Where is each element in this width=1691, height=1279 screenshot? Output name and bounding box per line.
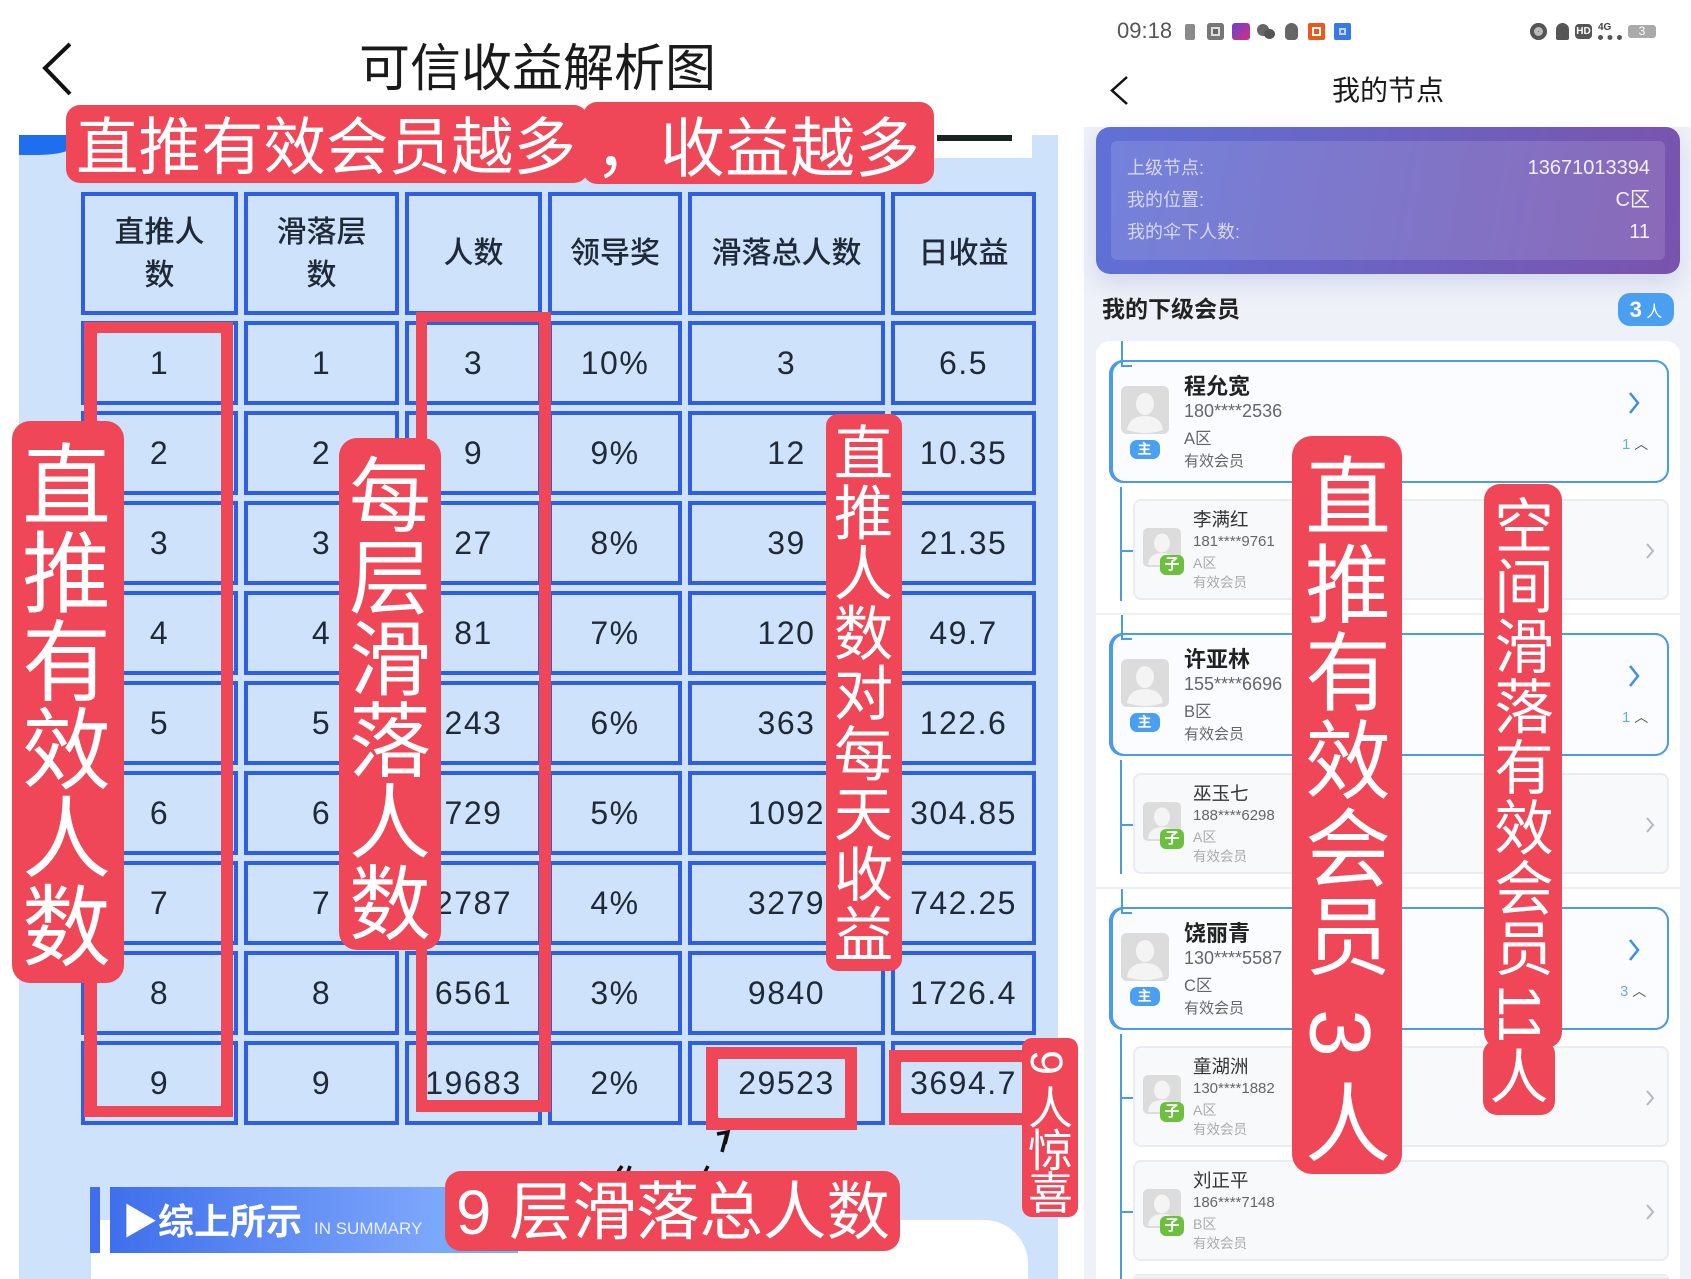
table row 2: 10.35 bbox=[920, 435, 1007, 471]
table row 6: 6 bbox=[312, 795, 331, 831]
table row 4 bbox=[124, 591, 1036, 675]
black stroke top right bbox=[937, 135, 1012, 141]
connector top 2 bbox=[1121, 615, 1132, 640]
member card: 许亚林 bbox=[1109, 633, 1669, 756]
arrow bbox=[1646, 1090, 1654, 1106]
phone: 188****6298 bbox=[1193, 807, 1275, 824]
badge: 子 bbox=[1164, 1217, 1180, 1234]
member card: 巫玉七 bbox=[1133, 773, 1669, 874]
area: B区 bbox=[1193, 1216, 1216, 1232]
red outline: 3694.7 cell bbox=[889, 1050, 1034, 1125]
table row 5: 6% bbox=[590, 705, 640, 741]
callout: top headline part 2: ，收益越多 bbox=[595, 112, 920, 184]
phone: 186****7148 bbox=[1193, 1194, 1275, 1211]
name: 巫玉七 bbox=[1193, 783, 1249, 804]
table row 9: 29523 bbox=[738, 1065, 835, 1101]
badge bbox=[1160, 555, 1184, 575]
table row 4: 120 bbox=[758, 615, 815, 651]
table header row: 日收益 bbox=[918, 237, 1008, 270]
phone: 130****5587 bbox=[1184, 948, 1282, 968]
table row 8: 6561 bbox=[435, 975, 512, 1011]
table row 9: 3694.7 bbox=[910, 1065, 1017, 1101]
name: 程允宽 bbox=[1184, 374, 1250, 399]
table row 1: 3 bbox=[777, 345, 796, 381]
red outline: people count column bbox=[416, 312, 551, 1112]
count badge bbox=[1618, 293, 1674, 326]
status bar left icons bbox=[1185, 23, 1351, 40]
summary heading text: ▶综上所示 bbox=[122, 1201, 302, 1242]
member card: 程允宽 bbox=[1109, 360, 1669, 483]
status bar right icons: HD bbox=[1576, 26, 1591, 37]
table row 3: 21.35 bbox=[920, 525, 1007, 561]
group divider 2 bbox=[1096, 887, 1680, 889]
status bar time: 09:18 bbox=[1117, 18, 1172, 43]
connector top 1 bbox=[1121, 341, 1132, 367]
arrow bbox=[1646, 818, 1654, 832]
table header row: 数 bbox=[306, 258, 336, 292]
table row 3: 39 bbox=[767, 525, 806, 561]
data table bbox=[81, 192, 1036, 1125]
table row 7: 4% bbox=[590, 885, 640, 921]
table header row: 滑落层 bbox=[276, 216, 366, 248]
name: 饶丽青 bbox=[1184, 921, 1250, 946]
phone: 180****2536 bbox=[1184, 401, 1282, 421]
name: 许亚林 bbox=[1184, 647, 1250, 672]
table row 2: 9 bbox=[464, 435, 483, 471]
status: 有效会员 bbox=[1193, 1122, 1247, 1137]
table row 9: 2% bbox=[590, 1065, 640, 1101]
label: my position: 我的位置: bbox=[1127, 190, 1204, 210]
name: 李满红 bbox=[1193, 509, 1249, 530]
hand-drawn arrow marks bbox=[616, 1130, 730, 1171]
value: my umbrella count: 11 bbox=[1629, 221, 1650, 243]
summary section white panel bbox=[91, 1220, 1028, 1279]
callout: vertical per-layer spillover: 每层滑落人数 bbox=[336, 453, 428, 943]
table header row: 人数 bbox=[444, 237, 504, 270]
table row 5: 243 bbox=[445, 705, 502, 741]
table row 9: 9 bbox=[150, 1065, 169, 1101]
table row 7: 742.25 bbox=[910, 885, 1017, 921]
table header row: 直推人 bbox=[114, 216, 204, 248]
avatar bbox=[1143, 1075, 1181, 1114]
table row 8: 9840 bbox=[748, 975, 825, 1011]
table row 1: 10% bbox=[581, 345, 649, 381]
table row 5: 363 bbox=[758, 705, 815, 741]
table header row: 领导奖 bbox=[570, 237, 660, 270]
right title: 我的节点 bbox=[1332, 75, 1444, 106]
table row 6: 1092 bbox=[748, 795, 825, 831]
table row 1: 1 bbox=[312, 345, 331, 381]
table row 4: 49.7 bbox=[929, 615, 998, 651]
connector branch 4 bbox=[1122, 1211, 1133, 1213]
avatar bbox=[1121, 386, 1169, 434]
badge: 主 bbox=[1138, 714, 1152, 730]
status bar right icons: 3 bbox=[1639, 24, 1645, 38]
callout: nine layer spillover total: 9 层滑落总人数 bbox=[456, 1178, 890, 1248]
status: 有效会员 bbox=[1193, 1236, 1247, 1251]
connector down 3 bbox=[1120, 1034, 1122, 1279]
callout: vertical spillover valid members 11: 空间滑落有效会员 11 bbox=[1486, 495, 1553, 1048]
panel: right phone grey background bbox=[1084, 127, 1691, 1279]
table row 2: 12 bbox=[767, 435, 806, 471]
table row 6: 729 bbox=[445, 795, 502, 831]
status: 有效会员 bbox=[1184, 1000, 1244, 1017]
connector down 2 bbox=[1120, 760, 1122, 874]
table row 8 bbox=[81, 951, 1036, 1035]
avatar bbox=[1121, 933, 1169, 981]
avatar bbox=[1121, 659, 1169, 707]
arrow bbox=[1646, 544, 1654, 558]
panel top-right white notch bbox=[890, 135, 1032, 158]
left header: back chevron bbox=[42, 42, 72, 96]
member card: 李满红 bbox=[1133, 499, 1669, 600]
table row 9: 9 bbox=[312, 1065, 331, 1101]
table row 8: 3% bbox=[590, 975, 640, 1011]
table row 5: 5 bbox=[150, 705, 169, 741]
callout: vertical direct valid people: 直推有效人数 bbox=[9, 439, 109, 969]
group dividers bbox=[1096, 613, 1680, 615]
connector down 1 bbox=[1120, 487, 1122, 601]
label: my umbrella count: 我的伞下人数: bbox=[1127, 222, 1240, 242]
red outline: 29523 cell bbox=[706, 1047, 857, 1130]
badge: 主 bbox=[1138, 988, 1152, 1004]
table row 7 bbox=[124, 861, 1036, 945]
connector top 3 bbox=[1121, 889, 1132, 914]
badge bbox=[1130, 440, 1160, 459]
table row 5: 122.6 bbox=[920, 705, 1007, 741]
name: 刘正平 bbox=[1193, 1170, 1249, 1191]
status: 有效会员 bbox=[1184, 726, 1244, 743]
connector branch 1 bbox=[1122, 550, 1133, 552]
table row 1: 1 bbox=[150, 345, 169, 381]
table row 8: 8 bbox=[150, 975, 169, 1011]
count badge: 3 人 bbox=[1630, 297, 1662, 322]
area: C区 bbox=[1184, 977, 1212, 995]
callout: nine people surprise: 9 人惊喜 bbox=[1021, 1050, 1072, 1212]
child count: 1 ︿ bbox=[1622, 436, 1648, 453]
badge: 子 bbox=[1164, 556, 1180, 573]
table row 7: 2787 bbox=[435, 885, 512, 921]
table row 4: 81 bbox=[454, 615, 493, 651]
name: 童湖洲 bbox=[1193, 1056, 1249, 1077]
badge: 主 bbox=[1138, 441, 1152, 457]
connector branch 3 bbox=[1122, 1097, 1133, 1099]
area: A区 bbox=[1193, 829, 1216, 845]
table header row: 滑落总人数 bbox=[712, 237, 862, 270]
avatar bbox=[1143, 802, 1181, 841]
right header: back chevron bbox=[1110, 76, 1128, 105]
badge bbox=[1130, 713, 1160, 732]
summary banner bbox=[110, 1187, 518, 1253]
phone: 130****1882 bbox=[1193, 1080, 1275, 1097]
panel: member list bbox=[1096, 341, 1680, 1279]
value: my position: C区 bbox=[1616, 189, 1650, 211]
table row 6 bbox=[124, 771, 1036, 855]
table row 4: 4 bbox=[150, 615, 169, 651]
status bar right icons bbox=[1530, 22, 1656, 40]
table row 5: 5 bbox=[312, 705, 331, 741]
table row 3 bbox=[124, 501, 1036, 585]
arrow bbox=[1646, 1204, 1654, 1220]
partial next member card bbox=[1133, 1274, 1669, 1279]
area: A区 bbox=[1193, 555, 1216, 571]
callout: top headline part 1: 直推有效会员越多 bbox=[76, 113, 576, 183]
avatar bbox=[1143, 528, 1181, 567]
left title: 可信收益解析图 bbox=[359, 40, 716, 97]
table row 3: 3 bbox=[150, 525, 169, 561]
table row 7: 7 bbox=[150, 885, 169, 921]
badge: 子 bbox=[1164, 1103, 1180, 1120]
table header row: 数 bbox=[144, 258, 174, 292]
area: B区 bbox=[1184, 703, 1212, 721]
table row 8: 8 bbox=[312, 975, 331, 1011]
table row 1: 6.5 bbox=[939, 345, 988, 381]
table row 7: 3279 bbox=[748, 885, 825, 921]
phone: 155****6696 bbox=[1184, 674, 1282, 694]
panel: left light blue background bbox=[19, 135, 1058, 1279]
phone: 181****9761 bbox=[1193, 533, 1275, 550]
status bar right icons: 4G bbox=[1598, 22, 1611, 33]
table row 9 bbox=[81, 1041, 1025, 1125]
summary banner left bar bbox=[90, 1187, 100, 1253]
table row 7: 7 bbox=[312, 885, 331, 921]
summary english caption: IN SUMMARY bbox=[314, 1219, 422, 1238]
node info card bbox=[1096, 127, 1680, 274]
child count: 3 ︿ bbox=[1620, 983, 1646, 1000]
callout: vertical direct valid members 3: 直推有效会员 3 人 bbox=[1292, 452, 1388, 1167]
badge bbox=[1160, 829, 1184, 849]
arrow bbox=[1629, 665, 1640, 687]
member card: 饶丽青 bbox=[1109, 907, 1669, 1030]
badge bbox=[1130, 987, 1160, 1006]
member card: 刘正平 bbox=[1133, 1160, 1669, 1261]
status: 有效会员 bbox=[1184, 453, 1244, 470]
connector branch 2 bbox=[1122, 824, 1133, 826]
table row 5 bbox=[124, 681, 1036, 765]
status: 有效会员 bbox=[1193, 849, 1247, 864]
red outline: direct referrals column bbox=[84, 322, 233, 1117]
node info inner panel bbox=[1111, 141, 1665, 260]
section heading: subordinate members: 我的下级会员 bbox=[1102, 296, 1240, 322]
table row 6: 6 bbox=[150, 795, 169, 831]
badge: 子 bbox=[1164, 830, 1180, 847]
area: A区 bbox=[1193, 1102, 1216, 1118]
table row 2: 2 bbox=[150, 435, 169, 471]
callout: vertical daily income: 直推人数对每天收益 bbox=[826, 422, 892, 964]
panel top-left blue corner bbox=[19, 135, 79, 155]
avatar bbox=[1143, 1189, 1181, 1228]
table row 4: 4 bbox=[312, 615, 331, 651]
table row 3: 27 bbox=[454, 525, 493, 561]
table row 1: 3 bbox=[464, 345, 483, 381]
badge bbox=[1160, 1216, 1184, 1236]
table row 6: 304.85 bbox=[910, 795, 1017, 831]
value: superior node: 13671013394 bbox=[1528, 157, 1650, 179]
table row 6: 5% bbox=[590, 795, 640, 831]
table row 8: 1726.4 bbox=[910, 975, 1017, 1011]
status: 有效会员 bbox=[1193, 575, 1247, 590]
badge bbox=[1160, 1102, 1184, 1122]
table row 2 bbox=[81, 411, 1036, 495]
table row 2: 9% bbox=[590, 435, 640, 471]
table row 2: 2 bbox=[312, 435, 331, 471]
callout: people unit box: 人 bbox=[1489, 1045, 1548, 1111]
table row 3: 3 bbox=[312, 525, 331, 561]
area: A区 bbox=[1184, 430, 1212, 448]
arrow bbox=[1629, 392, 1640, 414]
label: superior node: 上级节点: bbox=[1127, 158, 1204, 178]
table row 3: 8% bbox=[590, 525, 640, 561]
member card: 童湖洲 bbox=[1133, 1046, 1669, 1147]
table row 9: 19683 bbox=[425, 1065, 522, 1101]
table row 4: 7% bbox=[590, 615, 640, 651]
table row 1 bbox=[81, 321, 1036, 405]
child count: 1 ︿ bbox=[1622, 709, 1648, 726]
table header row bbox=[81, 192, 1036, 1125]
arrow bbox=[1629, 939, 1640, 961]
